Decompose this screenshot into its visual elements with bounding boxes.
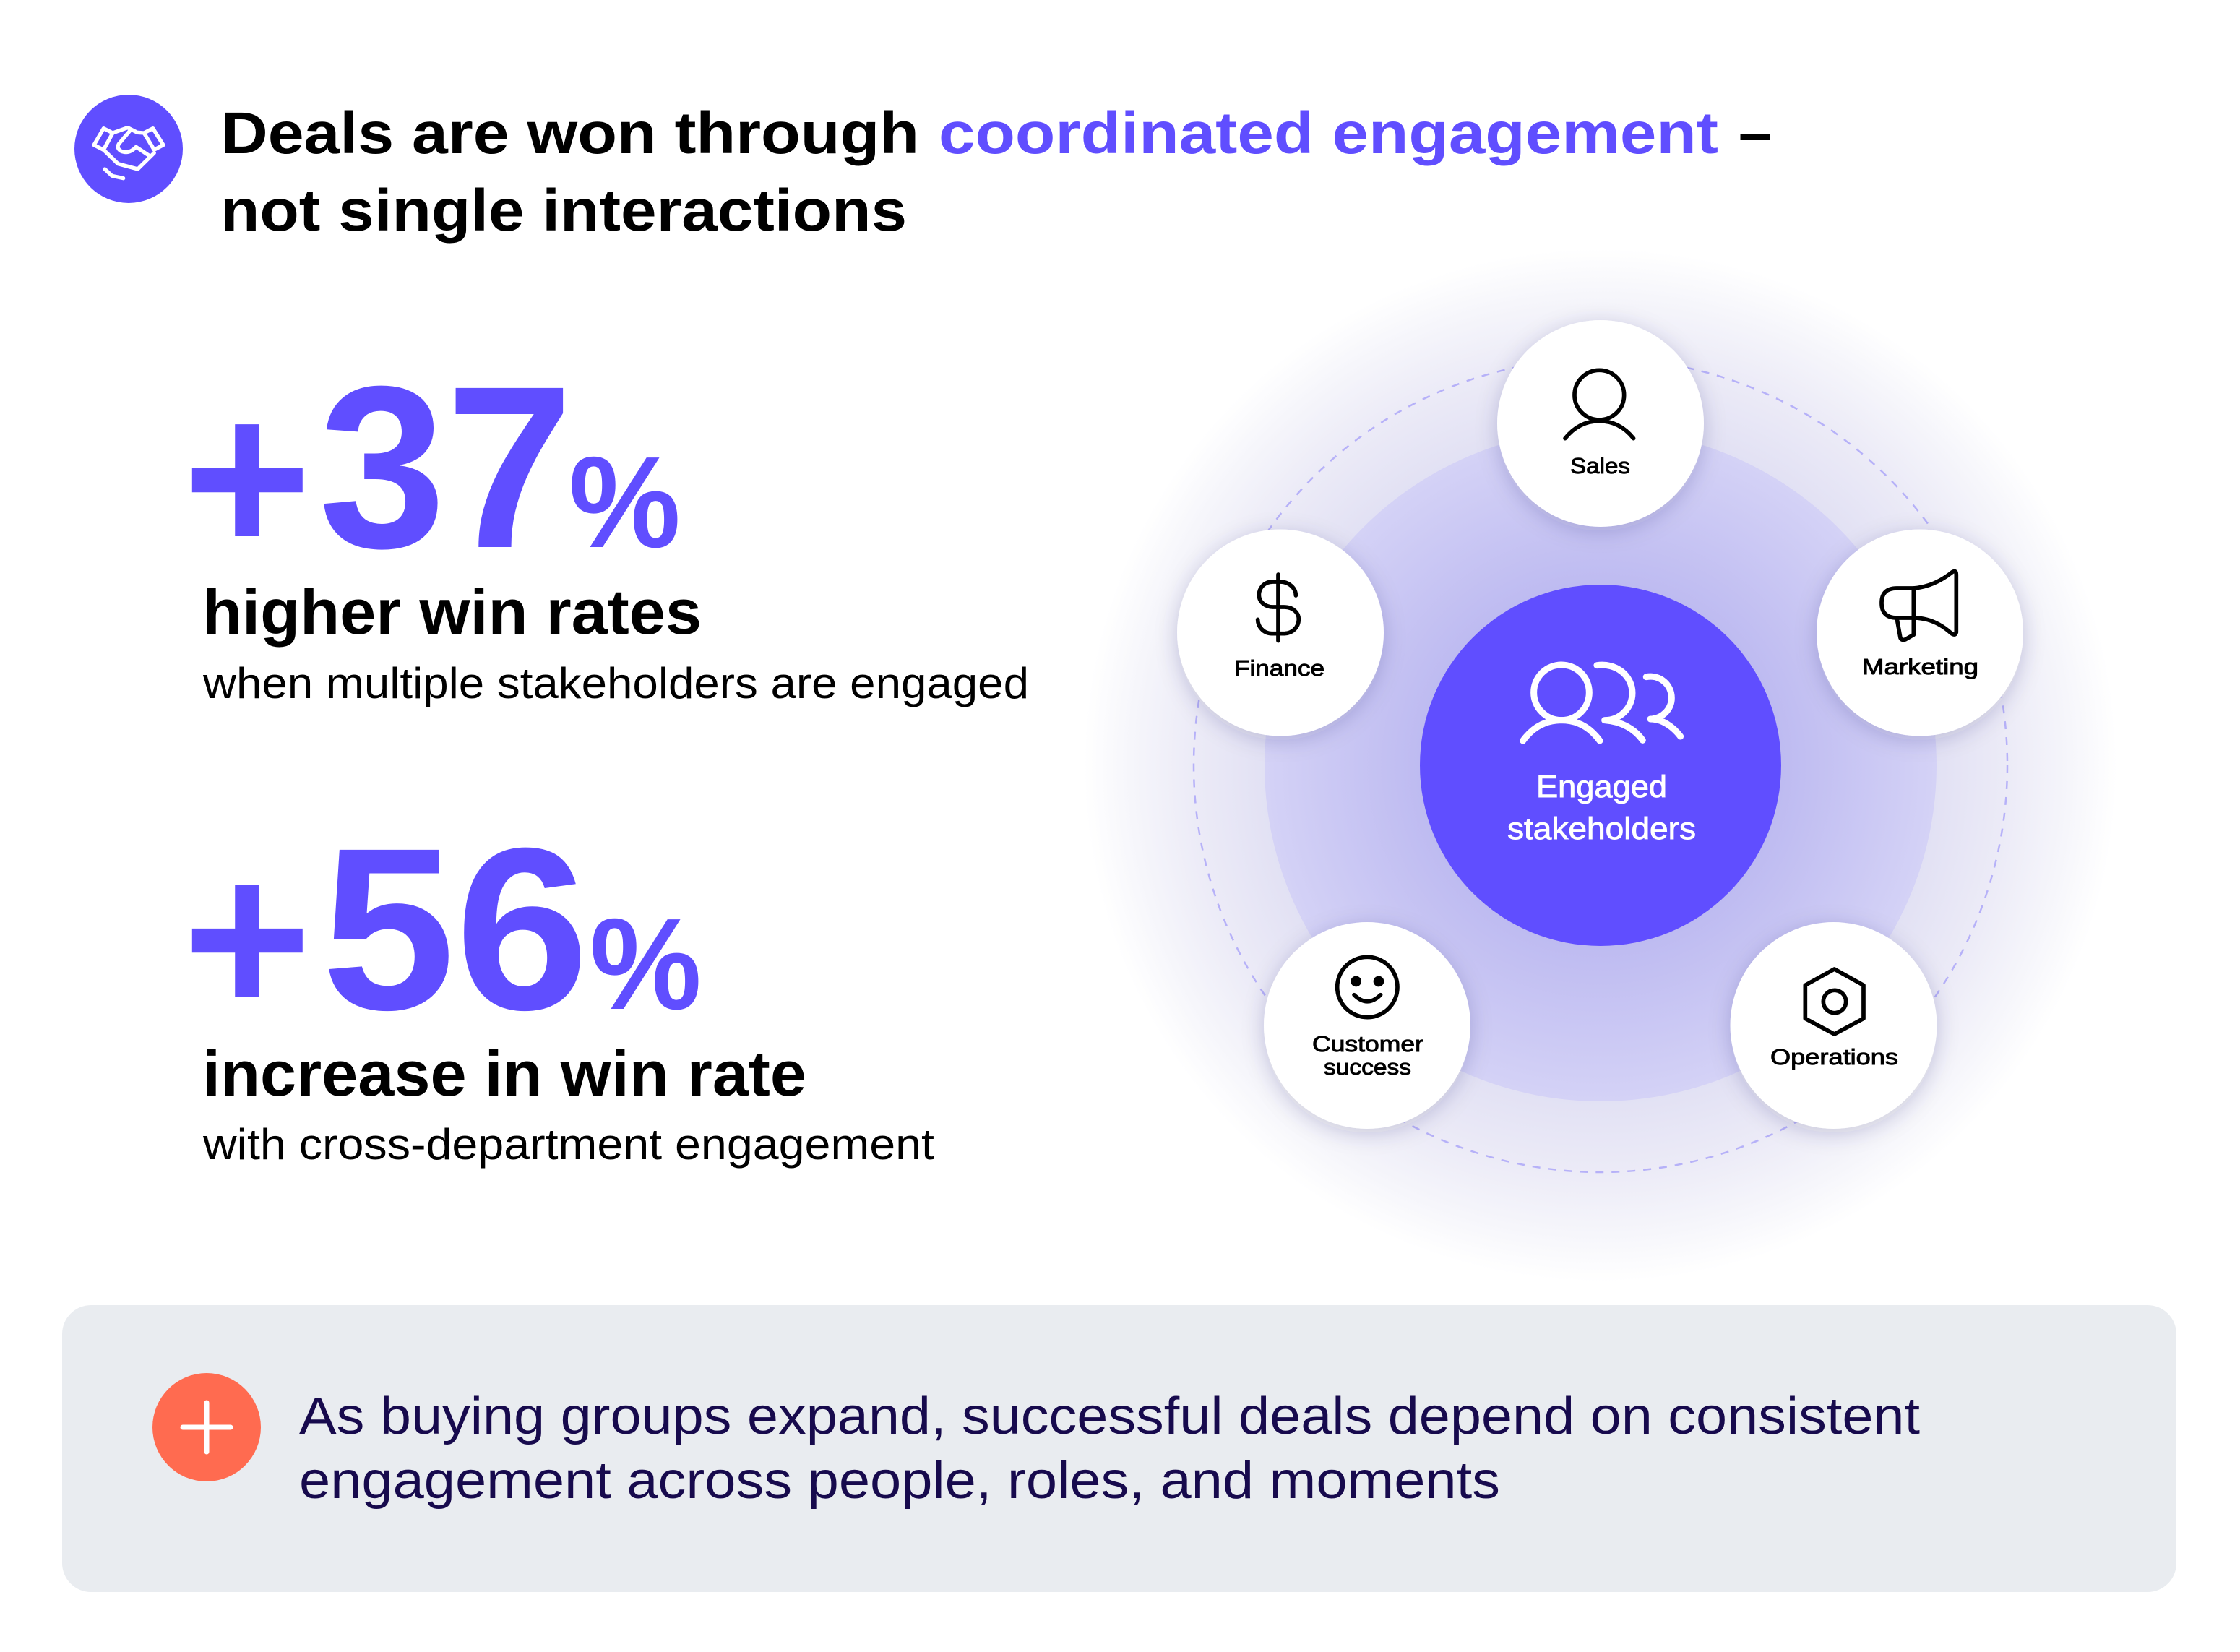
outer glow: [1084, 249, 2117, 1282]
icon: hex nut: [1805, 969, 1864, 1034]
takeaway text: As buying groups expand, successful deals depend on consistent: [299, 1388, 1920, 1445]
node: operations: [1730, 922, 1937, 1129]
node: marketing: [1817, 529, 2023, 736]
centre label: Engaged: [1536, 770, 1667, 804]
stat: +37% higher win rates: [183, 337, 1029, 707]
customer success label: Customer: [1312, 1031, 1423, 1057]
stat: +56% increase in win rate: 56: [322, 799, 589, 1058]
icon: dollar sign: [1258, 575, 1298, 641]
icon: person: [1565, 370, 1634, 439]
centre node: engaged stakeholders: [1420, 585, 1781, 946]
customer success label: success: [1324, 1054, 1411, 1080]
title: [220, 100, 1772, 244]
node: sales: Sales: [1570, 453, 1630, 478]
title: not single interactions: [220, 178, 907, 244]
centre label: stakeholders: [1507, 812, 1696, 846]
panel: takeaway: [62, 1305, 2176, 1592]
stat: +56% increase in win rate: [183, 799, 934, 1169]
title: –: [1739, 100, 1772, 166]
stat: +56% increase in win rate: with cross-department engagement: [202, 1120, 934, 1169]
icon: group of people: [1523, 665, 1681, 741]
takeaway text: engagement across people, roles, and moments: [299, 1452, 1500, 1510]
takeaway text: [299, 1388, 1920, 1510]
node: customer success: [1264, 922, 1470, 1129]
icon: coral plus: [152, 1373, 261, 1481]
stat: +56% increase in win rate: increase in win rate: [202, 1038, 806, 1109]
node: sales: [1497, 320, 1704, 527]
node: finance: Finance: [1234, 655, 1324, 681]
stat: +37% higher win rates: higher win rates: [202, 576, 702, 648]
title: Deals are won through: [221, 100, 919, 166]
node: finance: [1177, 529, 1384, 736]
stat: +37% higher win rates: 37: [319, 337, 573, 596]
title: coordinated engagement: [939, 100, 1718, 166]
node: operations: Operations: [1770, 1044, 1898, 1070]
stat: +37% higher win rates: when multiple stakeholders are engaged: [202, 659, 1029, 707]
icon: smiley: [1337, 957, 1397, 1018]
centre label: [1507, 770, 1696, 846]
header icon: handshake: [74, 95, 183, 203]
stat: +56% increase in win rate: %: [590, 892, 702, 1037]
stat: +56% increase in win rate: +: [183, 814, 311, 1061]
inner disc: [1265, 429, 1937, 1101]
stat: +37% higher win rates: +: [183, 354, 311, 601]
stat: +37% higher win rates: %: [569, 430, 681, 575]
dashed orbit ring: [1194, 358, 2007, 1172]
stakeholder diagram: [1084, 249, 2117, 1282]
customer success label: [1312, 1031, 1423, 1080]
icon: megaphone: [1882, 572, 1956, 640]
node: marketing: Marketing: [1862, 654, 1978, 679]
